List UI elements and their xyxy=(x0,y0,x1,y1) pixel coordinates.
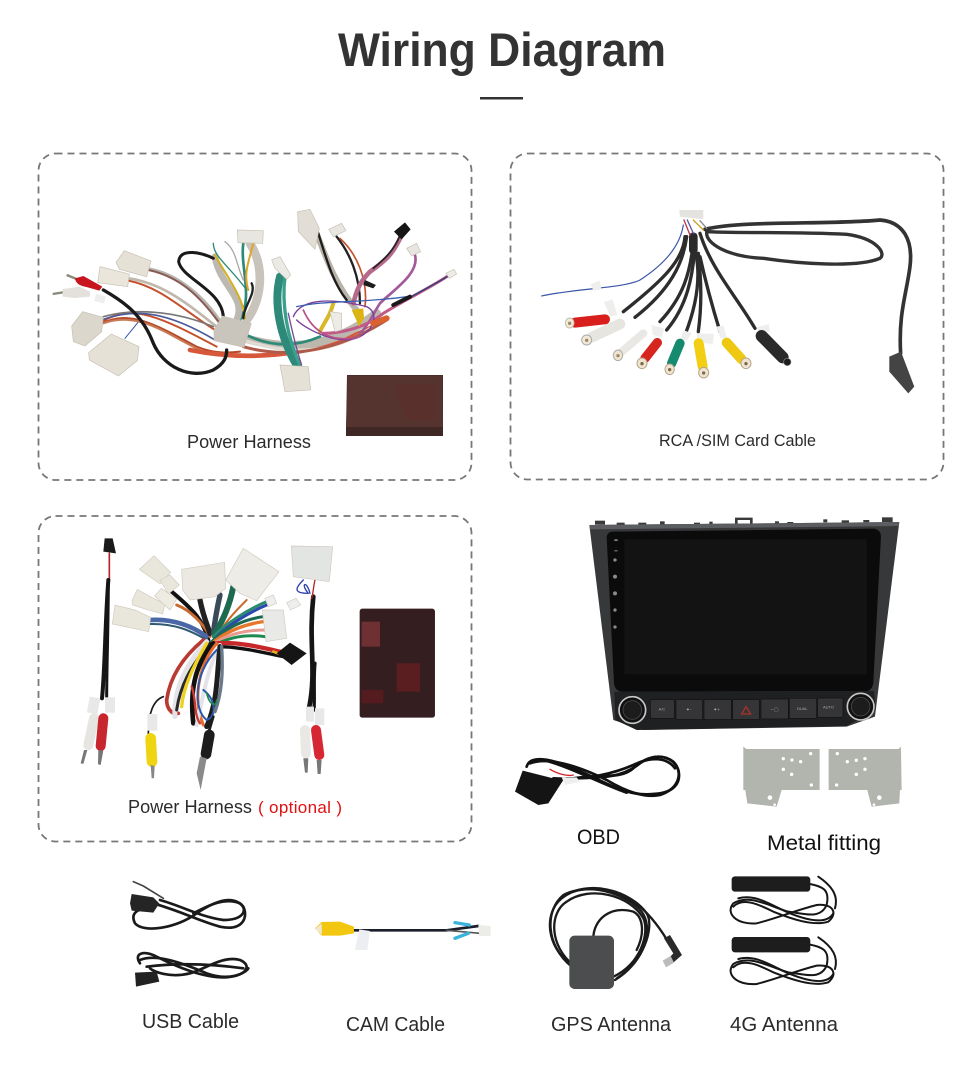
bezel xyxy=(589,522,899,730)
label: RCA /SIM Card Cable xyxy=(659,432,816,450)
CAM label: CAM Cable xyxy=(346,1014,445,1036)
panel: power harness xyxy=(38,154,472,480)
panel border xyxy=(38,516,472,842)
4G label: 4G Antenna xyxy=(730,1014,839,1036)
tags xyxy=(591,281,770,344)
mounting tabs xyxy=(595,517,893,525)
knobs xyxy=(619,693,874,723)
CAM cable xyxy=(315,922,491,950)
tags xyxy=(87,697,324,731)
label: Power Harness xyxy=(187,431,311,452)
screen glass xyxy=(607,529,881,692)
title underline xyxy=(480,97,523,100)
SIM module xyxy=(889,352,914,393)
title: Wiring Diagram xyxy=(338,23,666,76)
button labels xyxy=(659,705,834,712)
hub connector xyxy=(679,210,703,219)
metal fittings xyxy=(743,747,902,807)
4G antennas xyxy=(731,876,836,984)
optional note: ( optional ) xyxy=(258,798,342,817)
USB cables xyxy=(130,882,248,987)
left bracket xyxy=(743,747,820,807)
panel: optional power harness xyxy=(38,516,472,842)
GPS label: GPS Antenna xyxy=(551,1014,672,1036)
connector shells xyxy=(72,209,457,392)
USB plugs xyxy=(130,894,159,913)
yellow RCA plug xyxy=(315,922,354,936)
USB label: USB Cable xyxy=(142,1011,239,1033)
decoder box xyxy=(346,375,443,436)
tag xyxy=(355,929,370,950)
antenna puck xyxy=(569,936,614,989)
screen xyxy=(624,539,867,674)
label: Power Harness xyxy=(128,796,252,817)
button labels: ✦- xyxy=(686,707,692,712)
decoder box xyxy=(360,609,435,718)
button labels: AUTO xyxy=(823,705,834,710)
button labels: ∼◯ xyxy=(770,707,779,712)
optional harness assembly xyxy=(81,538,435,790)
OBD label: OBD xyxy=(577,825,620,849)
GPS antenna xyxy=(550,888,682,989)
white connectors xyxy=(112,546,333,642)
right bracket xyxy=(829,747,902,807)
panel: RCA SIM card cable xyxy=(510,154,944,480)
button labels: ✦+ xyxy=(713,707,720,712)
RCA jacks xyxy=(565,318,791,378)
metal fitting label: Metal fitting xyxy=(767,831,881,855)
button labels: A/C xyxy=(659,707,665,712)
hazard icon xyxy=(742,707,751,714)
panel border xyxy=(38,154,472,480)
OBD plug xyxy=(515,771,563,805)
side buttons xyxy=(613,539,618,629)
RCA plugs xyxy=(81,718,322,790)
cable assembly xyxy=(542,210,914,393)
OBD cable xyxy=(515,757,679,805)
harness wires and connectors xyxy=(53,209,457,392)
head unit: car radio xyxy=(589,517,899,730)
panel border xyxy=(510,154,944,480)
climate panel xyxy=(614,691,876,730)
angled plug xyxy=(664,935,682,964)
RCA plugs xyxy=(67,275,77,279)
button labels: DUAL xyxy=(797,706,808,711)
